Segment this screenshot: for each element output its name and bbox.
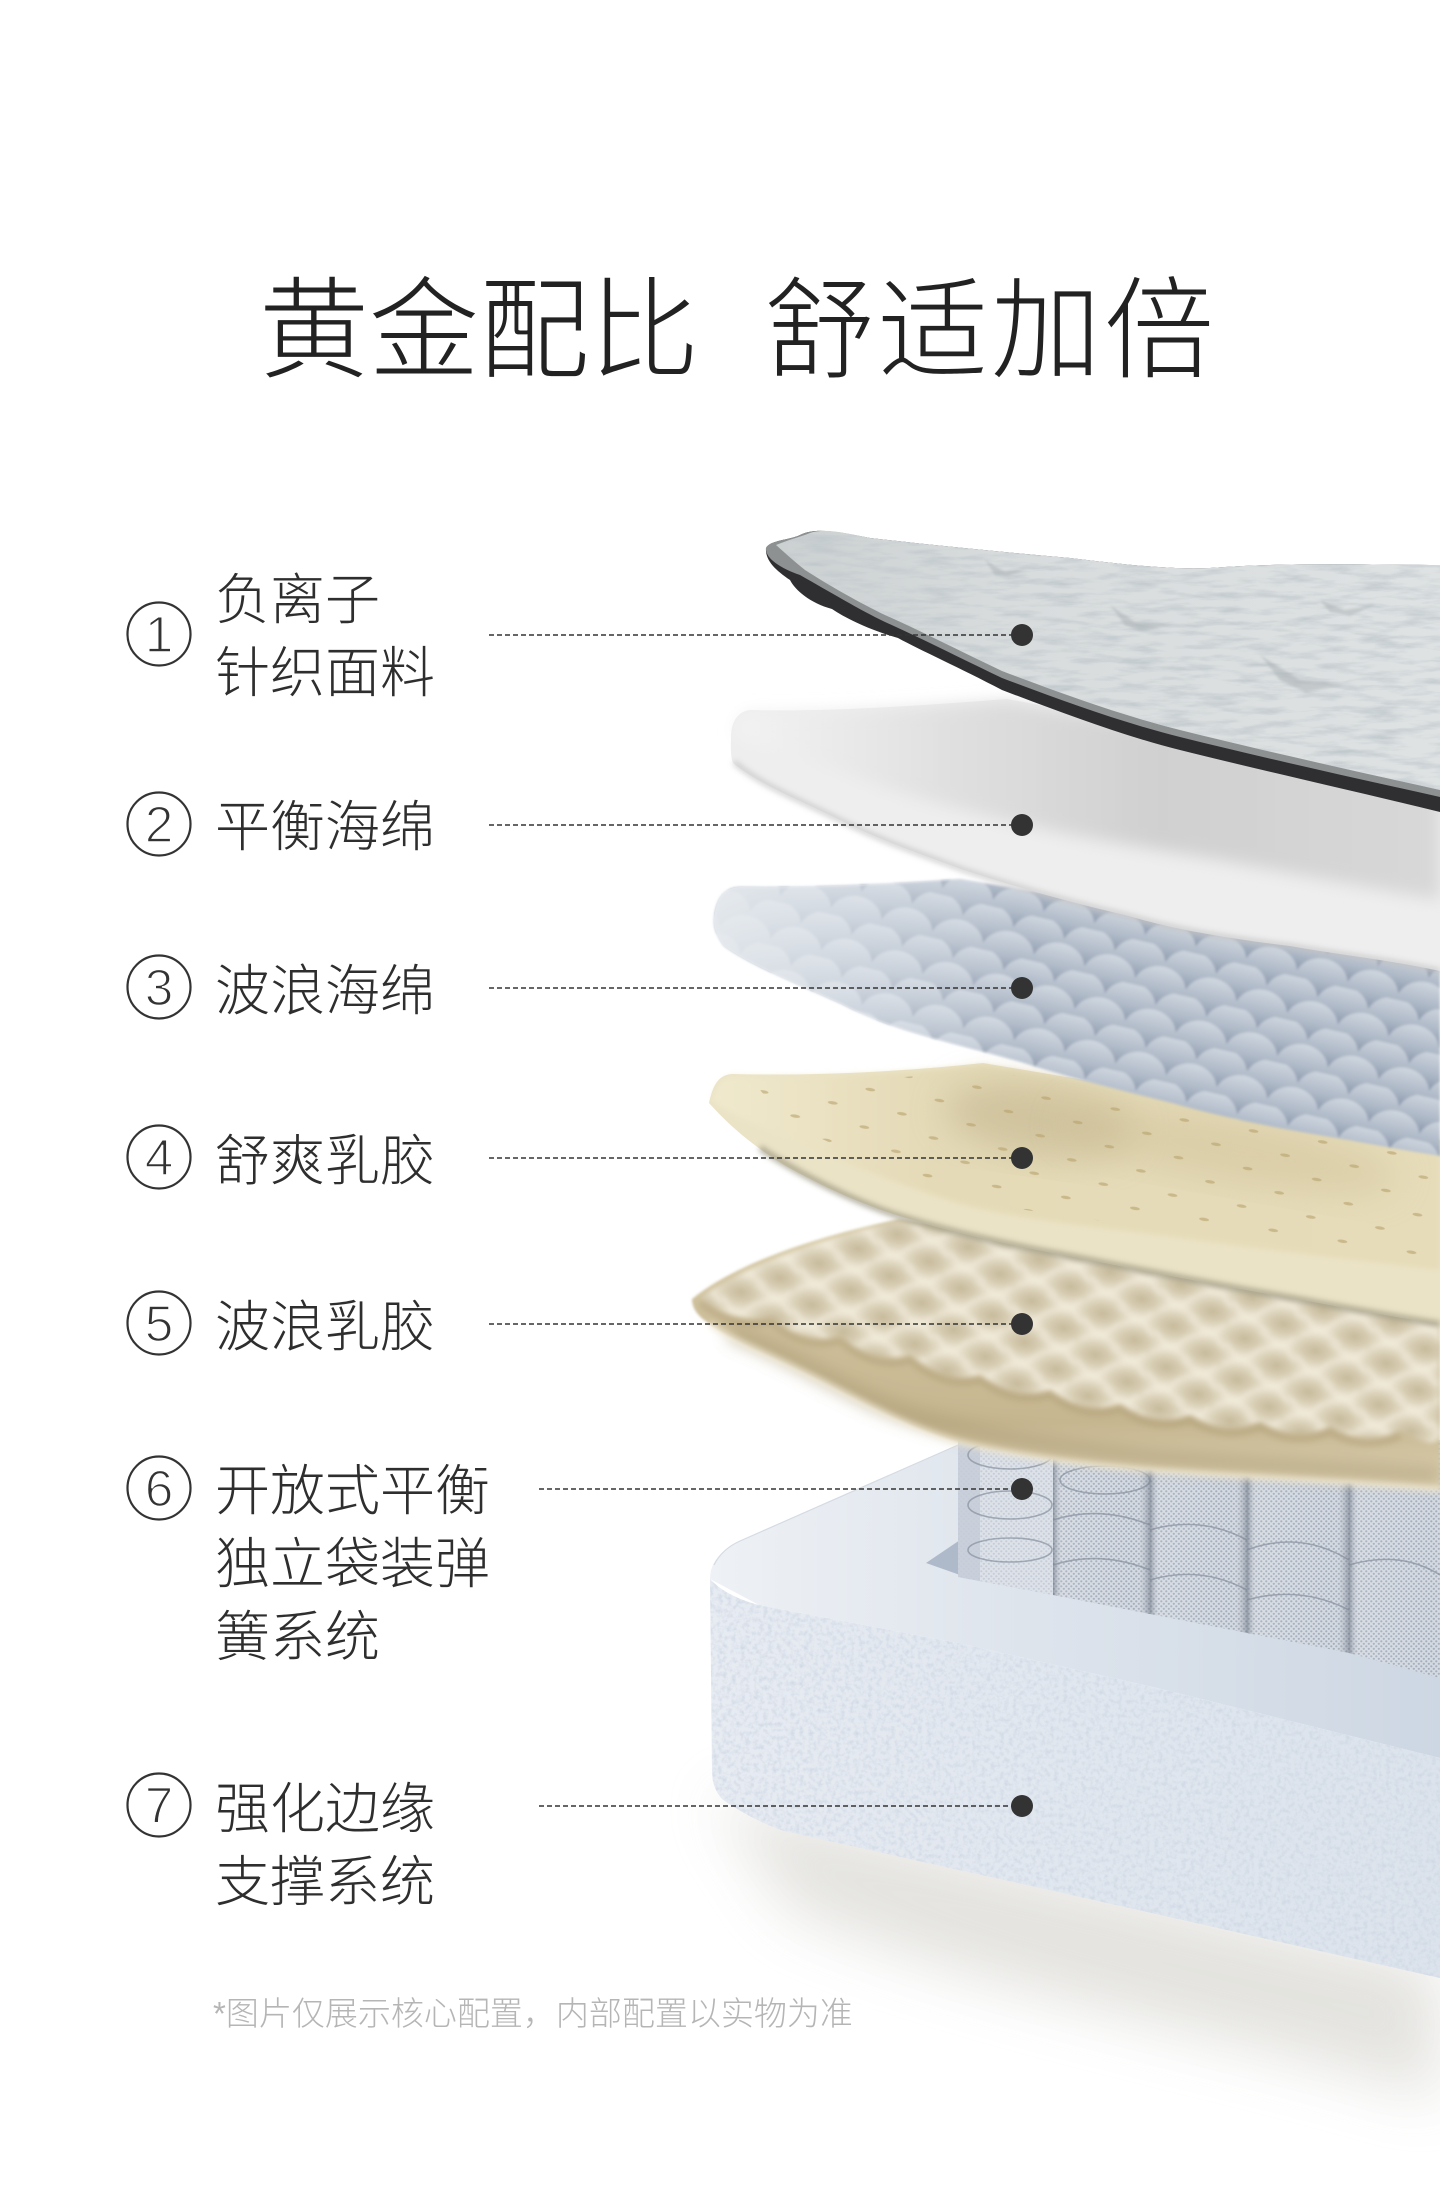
title: 黄金配比 xyxy=(259,270,699,393)
callout 6: open balanced pocket spring system: 簧系统 xyxy=(215,1606,380,1668)
callout 1: negative-ion knit fabric: 1 xyxy=(145,606,173,663)
callout 5: wavy latex: 波浪乳胶 xyxy=(215,1296,435,1358)
layer 5: wavy latex xyxy=(692,1219,1440,1490)
callout 4: comfort latex: 4 xyxy=(145,1129,173,1186)
callout 4: comfort latex xyxy=(128,1126,1033,1192)
callout 6: open balanced pocket spring system: 独立袋装弹 xyxy=(215,1533,490,1595)
mattress exploded illustration xyxy=(692,531,1440,2100)
callout 6: open balanced pocket spring system: 6 xyxy=(145,1460,173,1517)
callout 2: balance foam: 2 xyxy=(145,796,173,853)
callout 1: negative-ion knit fabric xyxy=(128,569,1033,704)
layer 4: comfort latex xyxy=(709,1063,1440,1324)
callout 3: wavy foam xyxy=(128,956,1033,1022)
callout 5: wavy latex xyxy=(128,1292,1033,1358)
ground shadow xyxy=(715,1795,1440,2100)
callout 7: reinforced edge support system: 支撑系统 xyxy=(215,1851,435,1913)
callout 5: wavy latex: 5 xyxy=(145,1295,173,1352)
layer 6: pocket spring system xyxy=(958,1440,1440,1677)
callout 1: negative-ion knit fabric: 负离子 xyxy=(215,569,380,631)
callout 2: balance foam xyxy=(128,792,1033,858)
callout 7: reinforced edge support system: 强化边缘 xyxy=(215,1778,435,1840)
callout 3: wavy foam: 波浪海绵 xyxy=(215,960,435,1022)
footnote: *图片仅展示核心配置，内部配置以实物为准 xyxy=(213,1995,853,2032)
callout 6: open balanced pocket spring system: 开放式平衡 xyxy=(215,1460,490,1522)
callout 7: reinforced edge support system xyxy=(128,1774,1033,1913)
layer 2: balance foam xyxy=(731,699,1440,971)
title: 舒适加倍 xyxy=(765,270,1217,393)
callout 1: negative-ion knit fabric: 针织面料 xyxy=(215,642,435,704)
callout 2: balance foam: 平衡海绵 xyxy=(215,796,435,858)
layer 3: wavy foam xyxy=(714,879,1440,1156)
callout 6: open balanced pocket spring system xyxy=(128,1456,1033,1668)
title xyxy=(259,270,1217,393)
callout 7: reinforced edge support system: 7 xyxy=(145,1777,173,1834)
layer 7: reinforced edge support frame xyxy=(710,1445,1440,1978)
callout 3: wavy foam: 3 xyxy=(145,959,173,1016)
layer 1: negative-ion knit fabric xyxy=(766,531,1440,812)
callout 4: comfort latex: 舒爽乳胶 xyxy=(215,1130,435,1192)
